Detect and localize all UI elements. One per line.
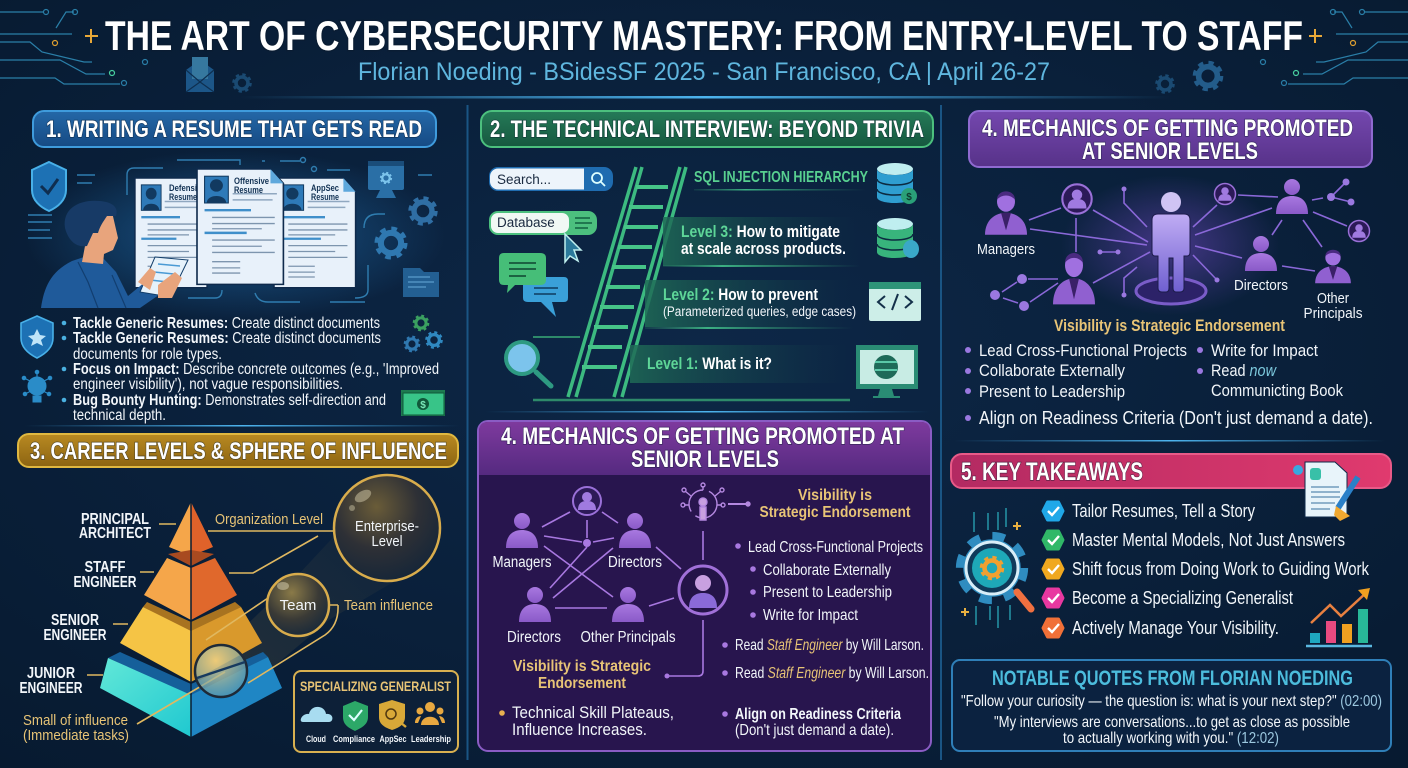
heading: panel 4 centre — [479, 422, 930, 475]
icon: appsec — [379, 700, 406, 730]
person: directors — [1245, 236, 1277, 271]
bullets: promotion actions: Read Staff Engineer by Will Larson. — [735, 637, 924, 654]
icon: money — [401, 390, 445, 416]
panel: 1 writing a resume — [21, 111, 445, 424]
panel: notable quotes — [952, 660, 1391, 751]
network labels — [977, 241, 1362, 322]
icon: money: $ — [420, 400, 426, 411]
icon: folder — [403, 268, 439, 297]
career labels: SENIOR — [51, 612, 99, 629]
panel: 5 key takeaways — [951, 454, 1391, 646]
heading: panel 5: 5. KEY TAKEAWAYS — [961, 458, 1143, 486]
resume: offensive: Offensive — [234, 176, 269, 186]
sphere: enterprise: Level — [372, 533, 402, 550]
heading: panel 1 — [33, 111, 436, 147]
bullets: promotion actions: Lead Cross-Functional Projects — [748, 539, 923, 556]
bullets: promotion actions: Collaborate Externally — [763, 562, 891, 579]
search bar — [489, 167, 613, 191]
career labels: ENGINEER — [74, 574, 136, 591]
icon: idea circuit — [681, 483, 750, 520]
divider — [25, 425, 460, 426]
resume: offensive: Resume — [234, 185, 263, 195]
item 2: Master Mental Models, Not Just Answers — [1072, 530, 1345, 550]
network illustration — [977, 175, 1370, 322]
divider — [485, 411, 930, 412]
level 2: (Parameterized queries, edge cases) — [663, 304, 856, 319]
sphere: enterprise: Enterprise- — [355, 518, 419, 535]
icon: gears — [378, 199, 435, 256]
callout: visibility right — [760, 487, 911, 521]
heading: panel 2 — [481, 111, 933, 147]
level 1: Level 1: What is it? — [647, 354, 772, 373]
bullets: resume advice: Focus on Impact: Describe concrete outcomes (e.g., 'Improved — [73, 361, 439, 378]
network labels: Directors — [1234, 277, 1288, 294]
person: directors — [619, 513, 651, 548]
influence labels: (Immediate tasks) — [23, 727, 129, 744]
person: lower suit — [1053, 253, 1095, 304]
sparkles — [85, 29, 1322, 43]
icon: envelope — [186, 57, 214, 92]
bullet: technical skill: Influence Increases. — [512, 721, 647, 739]
heading: panel 3: 3. CAREER LEVELS & SPHERE OF INFLUENCE — [30, 438, 447, 465]
callout: visibility: Visibility is Strategic Endorsement — [1054, 317, 1285, 335]
icon: database blue — [877, 163, 917, 204]
tier: senior engineer — [120, 602, 262, 682]
bullets: promotion actions: (Don't just demand a date). — [735, 722, 894, 739]
resume: appsec: Resume — [311, 192, 339, 202]
heading: panel 4 centre: 4. MECHANICS OF GETTING PROMOTED AT — [501, 423, 904, 450]
sphere: enterprise — [334, 475, 440, 581]
icon: monitor gear — [368, 161, 404, 198]
panel: 4 mechanics right — [965, 111, 1373, 428]
sql injection heading: SQL INJECTION HIERARCHY — [694, 169, 868, 186]
heading: panel 5 — [951, 454, 1391, 488]
icon: star shield — [21, 316, 53, 358]
influence labels — [23, 511, 433, 744]
influence labels: Team influence — [344, 597, 433, 614]
panel: 3 career levels — [18, 434, 458, 752]
quote 2 — [994, 714, 1350, 747]
callout: visibility left: Visibility is Strategic — [513, 658, 651, 675]
icon: cloud — [301, 707, 332, 722]
bullets: promotion actions — [722, 539, 929, 739]
resume: offensive — [197, 169, 283, 284]
icon: lightbulb — [22, 370, 52, 402]
callout: visibility left: Endorsement — [538, 675, 627, 692]
resume: appsec: AppSec — [311, 183, 339, 193]
icon: compliance shield — [343, 701, 368, 731]
level 2: Level 2: How to prevent — [663, 285, 818, 304]
bullets: promotion actions: Align on Readiness Criteria — [735, 706, 901, 723]
sphere: small — [195, 645, 247, 697]
resume: defensive — [135, 178, 207, 288]
bullets: resume advice: Tackle Generic Resumes: Create distinct documents — [73, 330, 381, 347]
tier: junior engineer — [100, 652, 282, 737]
network links — [542, 512, 703, 676]
icon: monitor — [856, 345, 918, 397]
career labels: ARCHITECT — [79, 525, 151, 542]
bullets: promotion actions: Communicting Book — [1211, 381, 1343, 400]
avatar: top — [573, 487, 601, 515]
network labels: Managers — [492, 554, 552, 571]
heading: panel 4 centre: SENIOR LEVELS — [631, 446, 779, 473]
bullets: promotion actions: Read now — [1211, 361, 1277, 380]
heading: panel 3 — [18, 434, 458, 467]
connector lines — [87, 524, 338, 724]
influence labels: Small of influence — [23, 712, 128, 729]
panel: 2 technical interview — [481, 111, 933, 400]
avatar: far right — [1348, 220, 1370, 242]
bullets: promotion actions — [965, 341, 1373, 428]
sphere: team — [267, 574, 329, 636]
callout: specializing generalist: SPECIALIZING GENERALIST — [300, 678, 451, 694]
sphere: team: Team — [280, 597, 316, 614]
bullets: resume advice: documents for role types. — [73, 346, 222, 363]
pyramid — [100, 502, 282, 737]
network labels: Managers — [977, 241, 1035, 258]
illustration: person reviewing resumes — [25, 150, 445, 320]
bullets: promotion actions: Read Staff Engineer by Will Larson. — [735, 665, 929, 682]
bullets: resume advice: engineer visibility'), not vague responsibilities. — [73, 376, 343, 393]
panel: 4 mechanics centre — [478, 421, 931, 751]
icon: cursor — [565, 234, 581, 262]
icon: growth chart — [1306, 588, 1372, 646]
bullets: resume advice: technical depth. — [73, 407, 166, 424]
takeaways list — [1043, 501, 1370, 638]
resume: defensive: Defensi — [169, 183, 197, 193]
icon: header gears — [234, 64, 1220, 92]
heading: panel 1: 1. WRITING A RESUME THAT GETS READ — [46, 116, 422, 143]
network labels: Other Principals — [580, 629, 676, 646]
icon: document and pencil — [1293, 462, 1358, 521]
divider — [955, 440, 1385, 442]
bullet dots — [62, 321, 66, 402]
bullets: promotion actions: Present to Leadership — [763, 584, 892, 601]
tier: staff engineer — [144, 550, 237, 620]
figure: man with tablet — [41, 201, 188, 308]
database field — [489, 211, 597, 235]
bullets: resume advice: Tackle Generic Resumes: Create distinct documents — [73, 315, 380, 332]
subtitle: Florian Noeding - BSidesSF 2025 - San Francisco, CA | April 26-27 — [358, 58, 1050, 86]
network diagram — [492, 487, 727, 678]
level 3: Level 3: How to mitigate — [681, 222, 840, 241]
icon: code window — [869, 282, 921, 321]
icon: leadership — [415, 702, 445, 725]
influence labels: Organization Level — [215, 511, 323, 528]
career labels: ENGINEER — [20, 680, 82, 697]
tier: principal architect — [169, 502, 213, 556]
heading: panel 4 right — [969, 111, 1372, 167]
avatar: upper — [1062, 184, 1092, 214]
callout: specializing generalist — [294, 671, 458, 752]
icon: database blue: $ — [906, 192, 912, 203]
callout: specializing generalist: AppSec — [380, 734, 406, 745]
bullets: promotion actions: Align on Readiness Criteria (Don't just demand a date). — [979, 408, 1373, 428]
callout: specializing generalist: Compliance — [333, 734, 375, 745]
resume: defensive: Resume — [169, 192, 197, 202]
bullets: promotion actions: Lead Cross-Functional Projects — [979, 341, 1187, 360]
circuit traces left — [0, 10, 148, 86]
database field: Database — [497, 215, 555, 230]
career labels — [20, 511, 151, 697]
item 1: Tailor Resumes, Tell a Story — [1072, 501, 1255, 521]
circuit traces right — [1260, 10, 1408, 86]
header rule — [240, 96, 1170, 98]
bullets: promotion actions: Collaborate Externally — [979, 361, 1125, 380]
network labels: Other — [1317, 290, 1349, 307]
person: other principals — [1315, 250, 1351, 283]
career labels: PRINCIPAL — [81, 511, 149, 528]
icon: database green — [877, 218, 919, 258]
level 3: at scale across products. — [681, 239, 846, 258]
person: managers — [506, 513, 538, 548]
search bar: Search... — [497, 172, 551, 187]
figure: central person — [1136, 192, 1206, 304]
career labels: STAFF — [84, 559, 126, 576]
icon: shield check — [32, 162, 66, 211]
person: top right — [1276, 179, 1308, 214]
callout: specializing generalist: Leadership — [411, 734, 451, 745]
bullets: promotion actions: Present to Leadership — [979, 382, 1125, 401]
ladder — [568, 167, 686, 397]
callout: visibility right: Visibility is — [798, 487, 872, 504]
network labels: Directors — [608, 554, 662, 571]
callout: visibility left — [513, 658, 651, 692]
item 4: Become a Specializing Generalist — [1072, 588, 1293, 608]
bullets: resume advice: Bug Bounty Hunting: Demonstrates self-direction and — [73, 392, 386, 409]
ground line — [533, 399, 850, 401]
icon: gear magnifier — [961, 508, 1031, 628]
career labels: JUNIOR — [27, 665, 75, 682]
column dividers — [468, 105, 941, 760]
callout: specializing generalist: Cloud — [306, 734, 326, 745]
person: directors lower — [519, 587, 551, 622]
header — [0, 10, 1408, 98]
person: manager — [985, 191, 1027, 235]
callout: visibility right: Strategic Endorsement — [760, 504, 911, 521]
bullet: technical skill: Technical Skill Plateaus, — [512, 704, 674, 722]
bullets: resume advice — [21, 315, 445, 424]
network labels: Principals — [1304, 305, 1362, 322]
quote 2: to actually working with you." (12:02) — [1063, 730, 1279, 747]
network labels: Directors — [507, 629, 561, 646]
career labels: ENGINEER — [44, 627, 106, 644]
influence beams — [221, 530, 405, 695]
item 5: Actively Manage Your Visibility. — [1072, 618, 1279, 638]
bullets: promotion actions: Write for Impact — [763, 607, 858, 624]
decorative circuit lines — [28, 158, 432, 302]
resume: appsec — [274, 178, 356, 288]
network labels — [492, 554, 676, 646]
icon: small gears — [405, 316, 441, 351]
network links — [1002, 182, 1351, 303]
bullet: technical skill — [499, 704, 674, 739]
icon: magnifier — [506, 342, 551, 386]
bullets: promotion actions: Write for Impact — [1211, 341, 1318, 360]
avatar: upper right — [1214, 184, 1236, 204]
icon: chat bubbles — [499, 253, 568, 317]
level 2 — [645, 280, 856, 329]
person: other principals — [612, 587, 644, 622]
avatar: centre — [679, 566, 727, 614]
quote 1: "Follow your curiosity — the question is: what is your next step?" (02:00) — [961, 693, 1382, 710]
heading: panel 4 right: AT SENIOR LEVELS — [1082, 138, 1258, 165]
heading: panel 2: 2. THE TECHNICAL INTERVIEW: BEYOND TRIVIA — [490, 116, 924, 143]
level 1 — [630, 345, 847, 383]
level 3 — [663, 217, 860, 267]
